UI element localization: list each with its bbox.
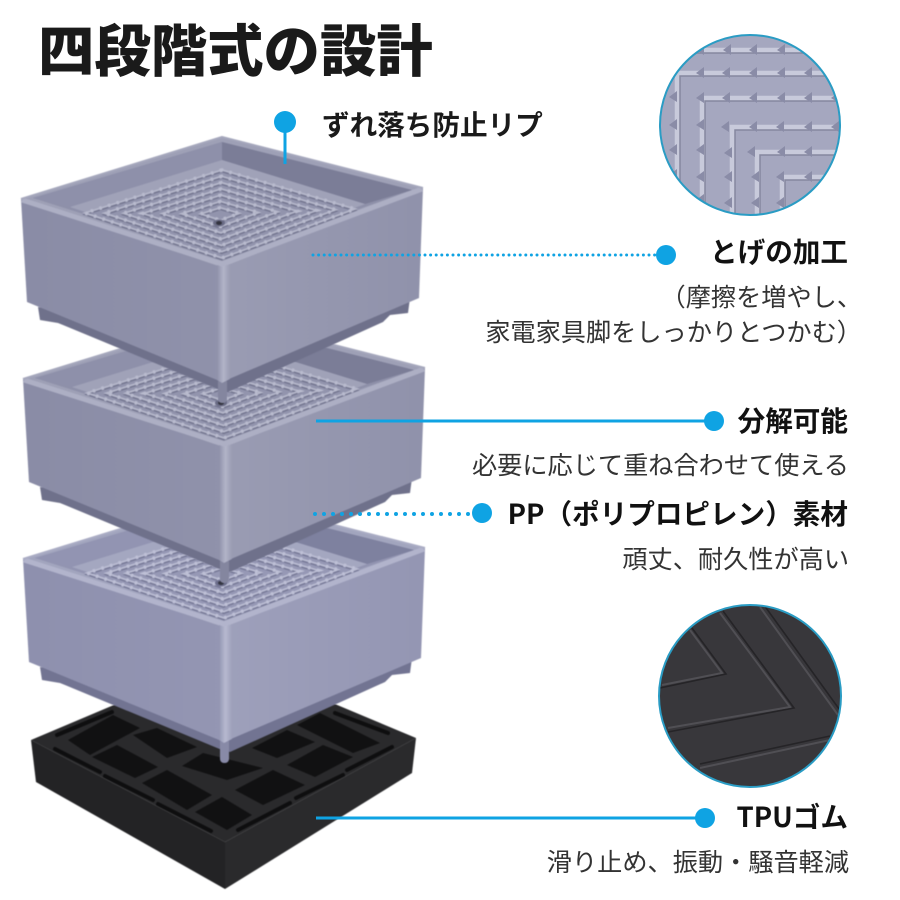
- callout: PP material: [315, 492, 849, 576]
- callout: detachable: 分解可能: [738, 399, 848, 439]
- title: 四段階式の設計: [38, 7, 433, 88]
- callout: spike finish: （摩擦を増やし、: [660, 278, 862, 314]
- callout: spike finish: とげの加工: [710, 230, 848, 270]
- product: middle grey PP tray: [23, 317, 425, 583]
- product: top grey PP tray: [21, 137, 423, 403]
- callout: TPU rubber: [316, 795, 849, 879]
- callout: anti-slip lip: ずれ落ち防止リプ: [322, 103, 543, 143]
- callout: TPU rubber: TPUゴム: [737, 795, 848, 835]
- callout: TPU rubber: 滑り止め、振動・騒音軽減: [547, 843, 849, 879]
- callout: anti-slip lip: [274, 103, 543, 164]
- callout: PP material: PP（ポリプロピレン）素材: [508, 492, 848, 532]
- detail circle: ridged surface close-up: [659, 34, 841, 216]
- callout: detachable: [316, 399, 849, 482]
- product: bottom grey PP tray: [23, 497, 425, 763]
- product: black TPU rubber base: [31, 658, 416, 889]
- callout: spike finish: [313, 230, 862, 349]
- detail circle: rubber surface close-up: [659, 605, 842, 787]
- callout: detachable: 必要に応じて重ね合わせて使える: [472, 446, 849, 482]
- callout: spike finish: 家電家具脚をしっかりとつかむ）: [485, 313, 862, 349]
- callout: PP material: 頑丈、耐久性が高い: [622, 540, 849, 576]
